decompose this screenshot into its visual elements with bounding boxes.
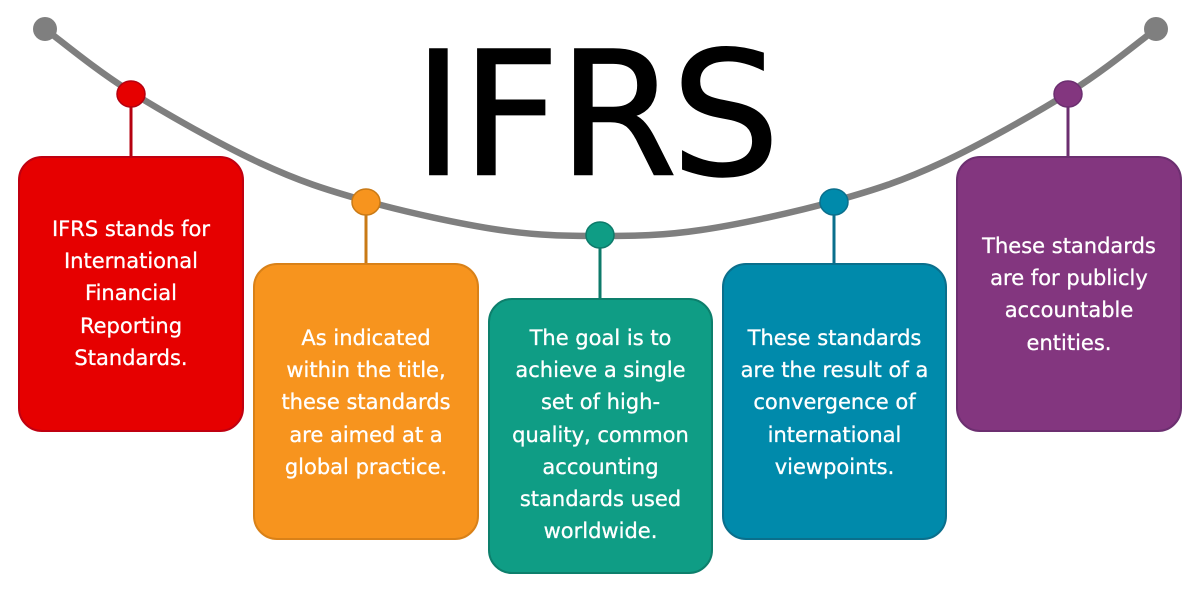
panel: green goal card: set of high- xyxy=(541,390,660,414)
panel: blue convergence card: These standards xyxy=(748,326,921,350)
panel: purple accountable entities card xyxy=(956,156,1182,432)
panel: blue convergence card xyxy=(722,263,947,540)
panel: orange global practice card xyxy=(253,263,479,540)
panel: blue convergence card: convergence of xyxy=(753,390,916,414)
panel: orange global practice card: are aimed at a xyxy=(289,423,443,447)
panel: red definition card: Standards. xyxy=(74,346,188,370)
panel: green goal card: The goal is to xyxy=(530,326,671,350)
panel: blue convergence card: viewpoints. xyxy=(775,455,894,479)
panel: orange global practice card: these standards xyxy=(281,390,451,414)
panel: red definition card: IFRS stands for xyxy=(52,217,210,241)
panel: green goal card: standards used xyxy=(520,487,681,511)
panel: green goal card xyxy=(488,298,713,574)
panel: green goal card: achieve a single xyxy=(515,358,686,382)
panel: red definition card: Reporting xyxy=(80,314,182,338)
panel: red definition card xyxy=(18,156,244,432)
panel: blue convergence card: international xyxy=(768,423,901,447)
panel: purple accountable entities card: These standards xyxy=(982,234,1156,258)
panel: purple accountable entities card: entities. xyxy=(1027,331,1111,355)
panel: orange global practice card: As indicated xyxy=(301,326,431,350)
panel: green goal card: worldwide. xyxy=(544,519,657,543)
panel: green goal card: accounting xyxy=(542,455,659,479)
panel: red definition card: Financial xyxy=(85,281,177,305)
panel: green goal card: quality, common xyxy=(512,423,689,447)
panel: blue convergence card: are the result of a xyxy=(741,358,928,382)
panel: purple accountable entities card: accountable xyxy=(1005,298,1133,322)
panel: red definition card: International xyxy=(64,249,198,273)
panel: orange global practice card: global practice. xyxy=(285,455,447,479)
panel: purple accountable entities card: are for publicly xyxy=(990,266,1148,290)
panel: orange global practice card: within the title, xyxy=(286,358,446,382)
